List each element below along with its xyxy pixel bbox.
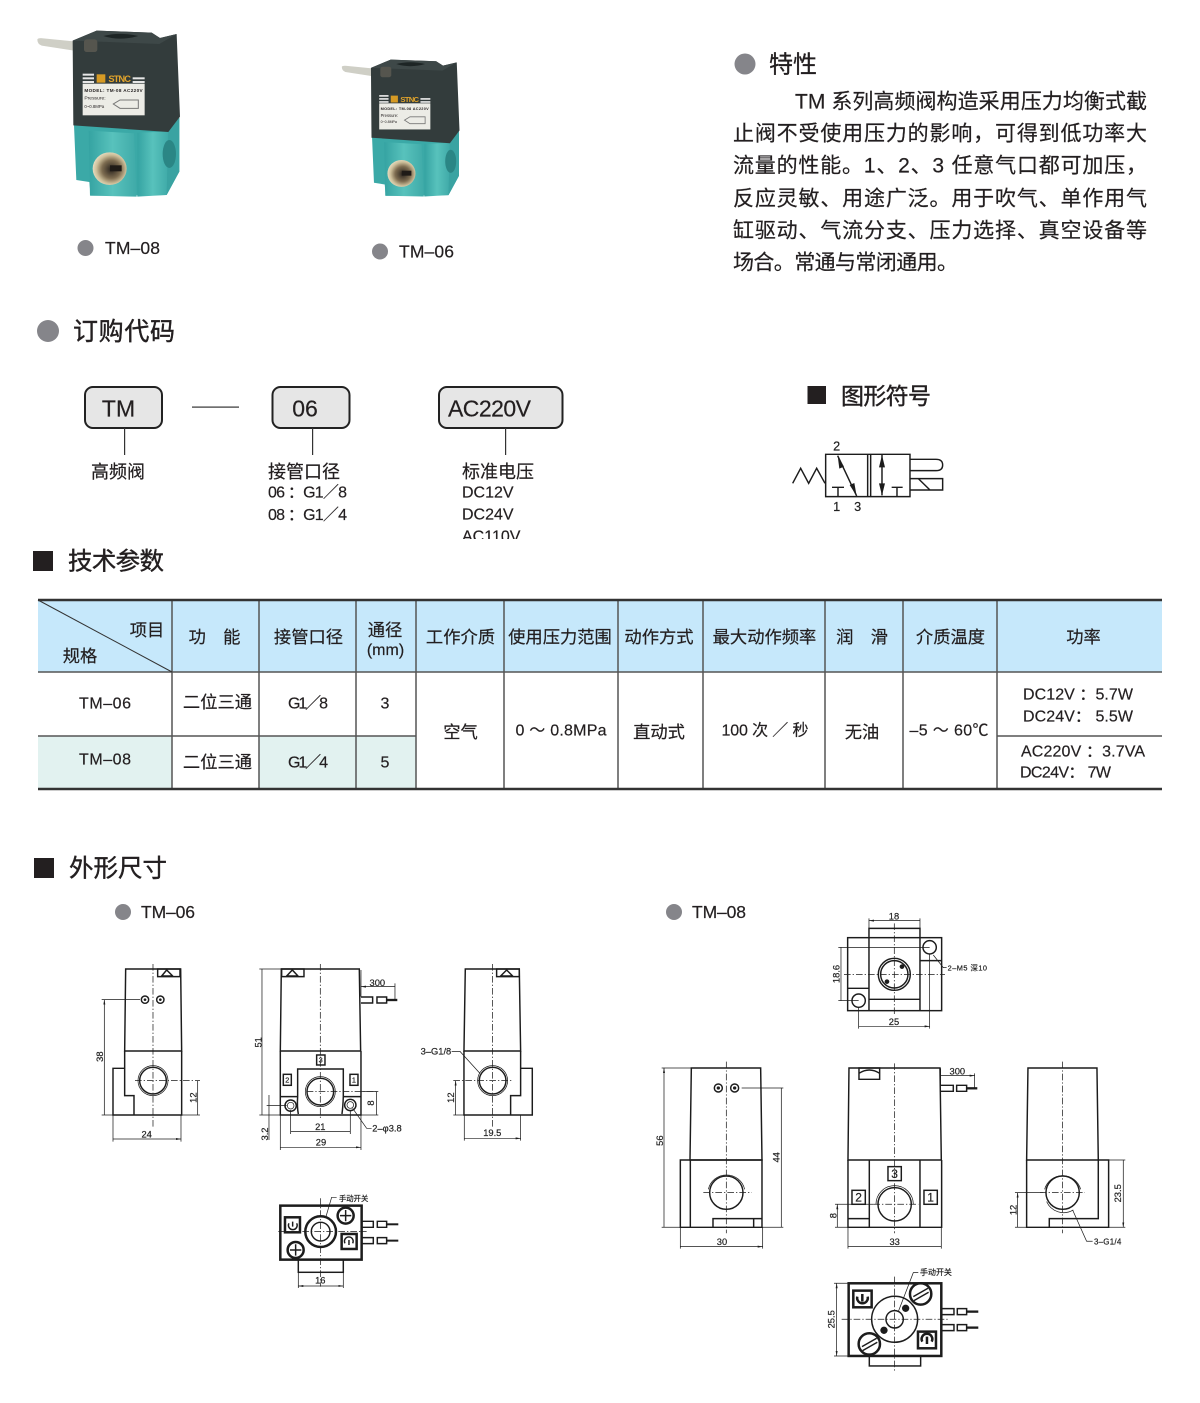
drawing: TM-08 front view xyxy=(828,1063,977,1249)
table: technical parameters: 使用压力范围 xyxy=(508,627,612,647)
drawing: TM-08 rear view: 3–G1/4 xyxy=(1094,1237,1122,1246)
drawing: TM-06 side view: 24 xyxy=(141,1129,152,1139)
table: technical parameters xyxy=(38,600,1162,789)
panel: features text: 流量的性能。1、2、3 任意气口都可加压， xyxy=(733,154,1147,178)
drawing: TM-06 front view: 300 xyxy=(370,978,385,988)
label: TM-08 drawings: TM–08 xyxy=(692,902,746,922)
drawing: TM-08 front view: 300 xyxy=(950,1067,965,1077)
table: technical parameters: 工作介质 xyxy=(426,627,495,647)
icon: pneumatic valve symbol: 2 xyxy=(833,439,840,453)
photo caption: TM-06: TM–06 xyxy=(399,242,454,262)
drawing: TM-06 front view: 3 xyxy=(319,1055,323,1064)
icon: pneumatic valve symbol xyxy=(793,439,943,514)
drawing: TM-08 front view: 2 xyxy=(855,1191,862,1205)
drawing: TM-06 rear view xyxy=(421,964,532,1141)
table: technical parameters: (mm) xyxy=(367,642,404,659)
drawing: TM-06 bottom view: 16 xyxy=(315,1276,326,1286)
drawing: TM-08 top view xyxy=(832,912,987,1029)
drawing: TM-06 rear view: 19.5 xyxy=(483,1128,501,1138)
drawing: TM-06 front view: 2 xyxy=(285,1075,289,1084)
table: technical parameters: DC24V： 7W xyxy=(1020,764,1112,782)
drawing: TM-08 side view: 56 xyxy=(655,1135,665,1146)
drawing: TM-06 front view: 21 xyxy=(315,1122,326,1132)
label: TM-06 drawings xyxy=(115,902,195,922)
panel: order code diagram: 标准电压 xyxy=(462,462,534,482)
drawing: TM-08 bottom view xyxy=(827,1267,978,1372)
drawing: TM-08 rear view: 12 xyxy=(1008,1205,1018,1215)
icon: pneumatic valve symbol: 3 xyxy=(854,500,861,514)
product photo: TM-08 valve: STNC xyxy=(108,74,131,84)
table: technical parameters: 接管口径 xyxy=(274,627,343,647)
panel: features text: TM 系列高频阀构造采用压力均衡式截 xyxy=(795,90,1147,114)
drawing: TM-08 top view: 25 xyxy=(889,1017,899,1027)
panel: features text: 反应灵敏、用途广泛。用于吹气、单作用气 xyxy=(733,188,1147,210)
drawing: TM-06 front view: 1 xyxy=(352,1075,356,1084)
table: technical parameters: 介质温度 xyxy=(916,627,985,647)
panel: order code diagram: AC220V xyxy=(448,396,532,422)
table: technical parameters: 项目 xyxy=(130,620,164,640)
drawing: TM-06 side view xyxy=(95,964,200,1142)
heading: order code: 订购代码 xyxy=(73,318,175,346)
table: technical parameters: 100 次 ／ 秒 xyxy=(722,722,808,740)
panel: order code diagram: TM xyxy=(102,396,135,422)
panel: features text: 特性 xyxy=(769,52,817,78)
table: technical parameters: AC220V ：3.7VA xyxy=(1021,744,1145,760)
table: technical parameters: 功 能 xyxy=(189,627,240,647)
panel: order code diagram: DC12V xyxy=(462,484,514,502)
drawing: TM-08 bottom view: 手动开关 xyxy=(920,1267,952,1277)
drawing: TM-08 rear view xyxy=(1008,1062,1125,1246)
icon: pneumatic valve symbol: 1 xyxy=(833,500,840,514)
table: technical parameters: 二位三通 xyxy=(183,692,252,712)
panel: order code diagram: 接管口径 xyxy=(268,462,340,482)
table: technical parameters: G1／4 xyxy=(288,754,328,772)
table: technical parameters: DC24V： 5.5W xyxy=(1023,708,1134,726)
panel: features text: 止阀不受使用压力的影响，可得到低功率大 xyxy=(733,122,1147,146)
photo caption: TM-08 xyxy=(78,238,160,258)
panel: order code diagram: 高频阀 xyxy=(91,462,145,482)
table: technical parameters: 动作方式 xyxy=(624,627,694,647)
table: technical parameters: TM–08 xyxy=(79,752,131,768)
drawing: TM-08 front view: 1 xyxy=(927,1191,934,1205)
table: technical parameters: –5 ～ 60℃ xyxy=(910,722,988,740)
drawing: TM-08 top view: 2–M5 深10 xyxy=(948,963,987,972)
panel: features text: 缸驱动、气流分支、压力选择、真空设备等 xyxy=(733,220,1147,242)
product photo: TM-08 valve xyxy=(37,31,180,197)
drawing: TM-06 front view: 8 xyxy=(366,1100,376,1106)
drawing: TM-06 bottom view xyxy=(278,1194,398,1288)
panel: order code diagram xyxy=(85,387,562,546)
table: technical parameters: TM–06 xyxy=(79,696,131,712)
product photo: TM-06 valve: 0~0.8MPa xyxy=(381,120,397,124)
drawing: TM-08 rear view: 23.5 xyxy=(1113,1184,1123,1202)
table: technical parameters: 无油 xyxy=(845,722,879,742)
table: technical parameters: 5 xyxy=(381,754,390,772)
drawing: TM-08 bottom view: 25.5 xyxy=(827,1310,837,1328)
drawing: TM-06 front view: 29 xyxy=(316,1138,326,1148)
table: technical parameters: 规格 xyxy=(63,646,97,666)
product photo: TM-06 valve: MODEL: TM-08 AC220V xyxy=(381,107,429,111)
panel: order code diagram: DC24V xyxy=(462,506,514,524)
heading: graphic symbol: 图形符号 xyxy=(841,383,931,409)
drawing: TM-06 front view xyxy=(253,964,402,1150)
table: technical parameters: 0 ～ 0.8MPa xyxy=(516,722,607,740)
drawing: TM-06 front view: 51 xyxy=(253,1037,263,1048)
table: technical parameters: 最大动作频率 xyxy=(713,627,816,647)
table: technical parameters: 通径 xyxy=(368,620,402,640)
label: TM-08 drawings xyxy=(666,902,746,922)
drawing: TM-08 side view: 30 xyxy=(717,1237,727,1247)
product photo: TM-08 valve: MODEL: TM-08 AC220V xyxy=(84,88,144,93)
label: TM-06 drawings: TM–06 xyxy=(141,902,195,922)
drawing: TM-08 side view: 44 xyxy=(771,1152,781,1163)
table: technical parameters: 3 xyxy=(381,696,390,712)
drawing: TM-06 side view: 12 xyxy=(188,1092,198,1103)
table: technical parameters: 功率 xyxy=(1066,627,1101,647)
heading: technical parameters: 技术参数 xyxy=(68,548,164,576)
drawing: TM-08 front view: 3 xyxy=(891,1167,898,1181)
heading: outline dimensions: 外形尺寸 xyxy=(69,854,167,882)
product photo: TM-08 valve: Pressure: xyxy=(84,96,106,102)
drawing: TM-06 side view: 38 xyxy=(95,1051,105,1062)
table: technical parameters: 二位三通 xyxy=(183,752,252,772)
panel: features text: 场合。常通与常闭通用。 xyxy=(733,252,958,274)
drawing: TM-08 top view: 18.6 xyxy=(832,965,842,983)
table: technical parameters: G1／8 xyxy=(288,696,328,712)
panel: order code diagram: 06 xyxy=(292,396,318,422)
panel: order code diagram: AC110V xyxy=(462,528,521,546)
drawing: TM-08 front view: 8 xyxy=(828,1213,838,1218)
product photo: TM-08 valve: 0~0.8MPa xyxy=(84,104,105,109)
drawing: TM-06 rear view: 12 xyxy=(446,1092,456,1103)
panel: order code diagram: 08 ：G1／4 xyxy=(268,507,347,524)
product photo: TM-06 valve xyxy=(342,60,460,197)
table: technical parameters: 直动式 xyxy=(633,722,685,742)
panel: features text xyxy=(733,52,1147,274)
drawing: TM-06 bottom view: 手动开关 xyxy=(339,1194,369,1203)
drawing: TM-06 front view: 3.2 xyxy=(260,1127,270,1140)
drawing: TM-08 front view: 33 xyxy=(889,1237,900,1247)
table: technical parameters: 空气 xyxy=(443,722,478,742)
photo caption: TM-08: TM–08 xyxy=(105,238,160,258)
drawing: TM-06 front view: 2–φ3.8 xyxy=(372,1124,402,1134)
product photo: TM-06 valve: Pressure: xyxy=(381,113,398,118)
drawing: TM-08 side view xyxy=(655,1062,783,1249)
drawing: TM-08 top view: 18 xyxy=(889,912,899,922)
table: technical parameters: 润 滑 xyxy=(836,627,888,647)
product photo: TM-06 valve: STNC xyxy=(400,95,420,104)
photo caption: TM-06 xyxy=(372,242,454,262)
drawing: TM-06 rear view: 3–G1/8 xyxy=(421,1046,451,1056)
table: technical parameters: DC12V ：5.7W xyxy=(1023,686,1134,704)
panel: order code diagram: 06 ：G1／8 xyxy=(268,484,347,502)
